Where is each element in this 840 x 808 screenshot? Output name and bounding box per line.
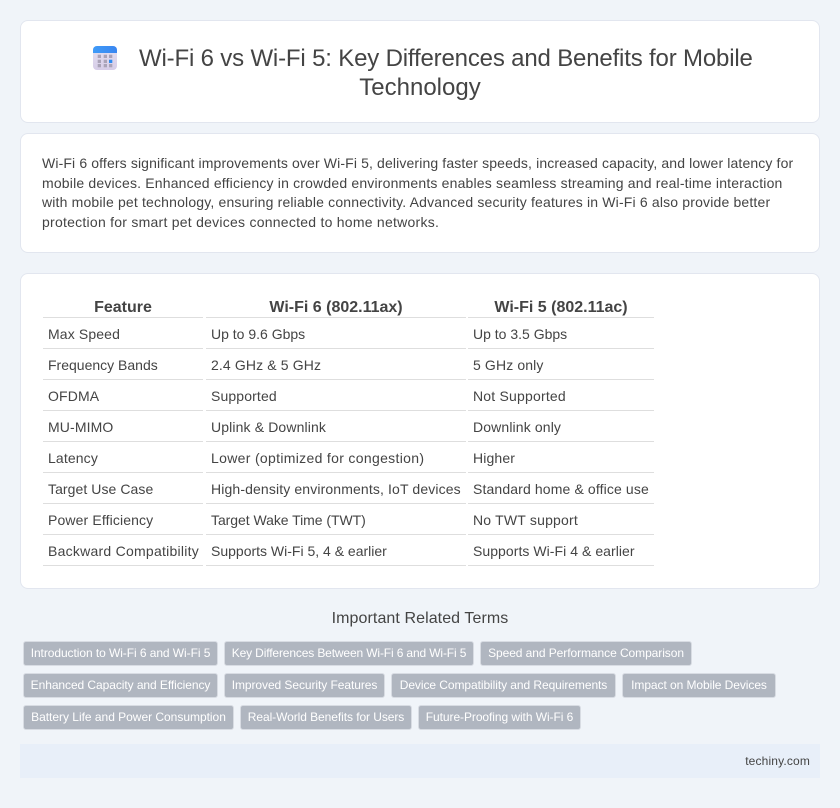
table: Power Efficiency [48,512,153,528]
icon: calendar [93,46,117,70]
panel: header [20,20,820,123]
tag list: Improved Security Features [232,678,377,692]
tag list: Battery Life and Power Consumption [31,710,226,724]
tag list: Device Compatibility and Requirements [400,678,607,692]
table: Downlink only [473,419,561,435]
table: No TWT support [473,512,578,528]
table: Up to 9.6 Gbps [211,326,305,342]
table: Up to 3.5 Gbps [473,326,567,342]
table: Latency [48,450,98,466]
panel: introduction [20,133,820,253]
table: Target Use Case [48,481,153,497]
title: Technology [359,74,481,101]
intro text: with mobile pet technology, ensuring reliable connectivity. Advanced security features in Wi-Fi 6 also provide better [42,194,770,210]
intro text: protection for smart pet devices connected to home networks. [42,214,439,230]
tag list: Speed and Performance Comparison [488,646,684,660]
table: Uplink & Downlink [211,419,326,435]
table: Higher [473,450,515,466]
table: Lower (optimized for congestion) [211,450,424,466]
footer: techiny.com [745,754,810,768]
table: Frequency Bands [48,357,158,373]
tag list: Future-Proofing with Wi-Fi 6 [426,710,573,724]
title [139,45,753,101]
table: High-density environments, IoT devices [211,481,461,497]
panel: comparison table [20,273,820,589]
table: 2.4 GHz & 5 GHz [211,357,321,373]
table: Wi-Fi 6 (802.11ax) [269,299,403,316]
intro text [42,155,793,230]
title: Wi-Fi 6 vs Wi-Fi 5: Key Differences and Benefits for Mobile [139,45,753,72]
intro text: mobile devices. Enhanced efficiency in crowded environments enables seamless streaming and real-time interaction [42,175,782,191]
intro text: Wi-Fi 6 offers significant improvements over Wi-Fi 5, delivering faster speeds, increased capacity, and lower latency for [42,155,793,171]
tag list: Real-World Benefits for Users [248,710,404,724]
table: Wi-Fi 5 (802.11ac) [494,299,628,316]
table: Standard home & office use [473,481,649,497]
table: Supported [211,388,277,404]
footer [20,744,820,778]
tag list: Impact on Mobile Devices [631,678,767,692]
tag list: Enhanced Capacity and Efficiency [31,678,210,692]
tag list: Key Differences Between Wi-Fi 6 and Wi-Fi 5 [232,646,466,660]
table: Target Wake Time (TWT) [211,512,366,528]
table: Not Supported [473,388,566,404]
heading: related terms: Important Related Terms [332,610,508,627]
table: MU-MIMO [48,419,113,435]
table: Feature [94,299,152,316]
table: Backward Compatibility [48,543,199,559]
tag list [23,641,776,730]
table: 5 GHz only [473,357,544,373]
table: OFDMA [48,388,99,404]
table: Supports Wi-Fi 5, 4 & earlier [211,543,387,559]
table [43,299,654,566]
table: Max Speed [48,326,120,342]
table: Supports Wi-Fi 4 & earlier [473,543,635,559]
tag list: Introduction to Wi-Fi 6 and Wi-Fi 5 [31,646,210,660]
